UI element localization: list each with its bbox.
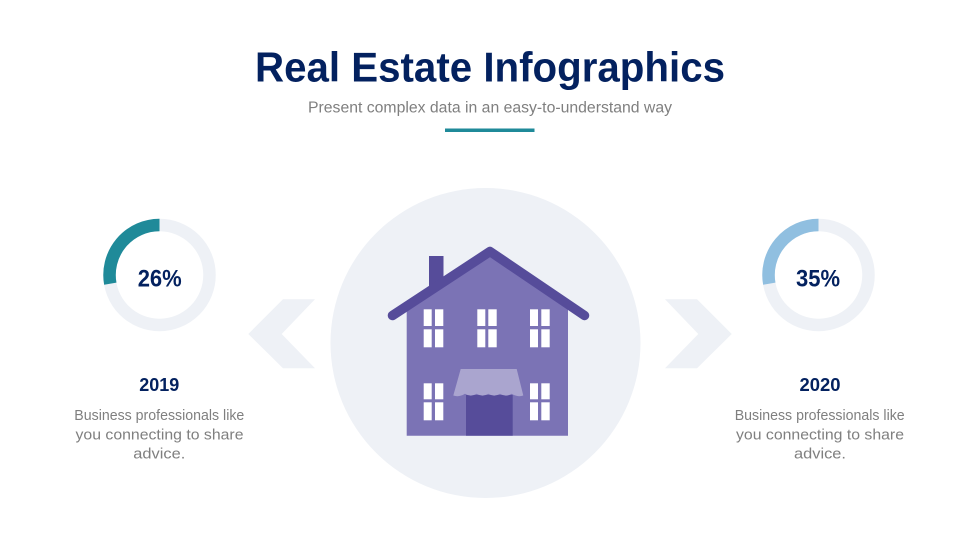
description: Business professionals like bbox=[74, 407, 244, 424]
title: Real Estate Infographics bbox=[255, 44, 725, 90]
central circle bbox=[330, 188, 640, 498]
lower windows bbox=[424, 383, 550, 420]
house body bbox=[407, 252, 568, 436]
description: advice. bbox=[794, 446, 846, 462]
subtitle: Present complex data in an easy-to-understand way bbox=[308, 100, 672, 116]
arrow: right chevron bbox=[665, 299, 732, 368]
donut chart: 26% bbox=[110, 225, 210, 325]
description: Business professionals like bbox=[735, 407, 905, 424]
upper windows bbox=[424, 309, 550, 347]
door bbox=[466, 395, 513, 436]
donut chart: 35% bbox=[768, 225, 868, 325]
year heading: 2020 bbox=[800, 375, 840, 395]
description: you connecting to share bbox=[736, 426, 904, 444]
donut chart: 26%: 26% bbox=[138, 266, 182, 292]
panel: 2020 bbox=[735, 225, 905, 462]
title underline bbox=[445, 128, 534, 132]
description: advice. bbox=[133, 446, 185, 462]
arrow: left chevron bbox=[248, 299, 315, 368]
donut chart: 35%: 35% bbox=[796, 266, 840, 292]
panel: 2019 bbox=[74, 225, 244, 462]
icon: house bbox=[392, 252, 584, 436]
chimney bbox=[429, 256, 444, 296]
year heading: 2019 bbox=[139, 375, 179, 395]
description: you connecting to share bbox=[76, 426, 244, 444]
description bbox=[74, 407, 244, 462]
awning bbox=[453, 369, 523, 396]
roof bbox=[392, 252, 584, 316]
description bbox=[735, 407, 905, 462]
